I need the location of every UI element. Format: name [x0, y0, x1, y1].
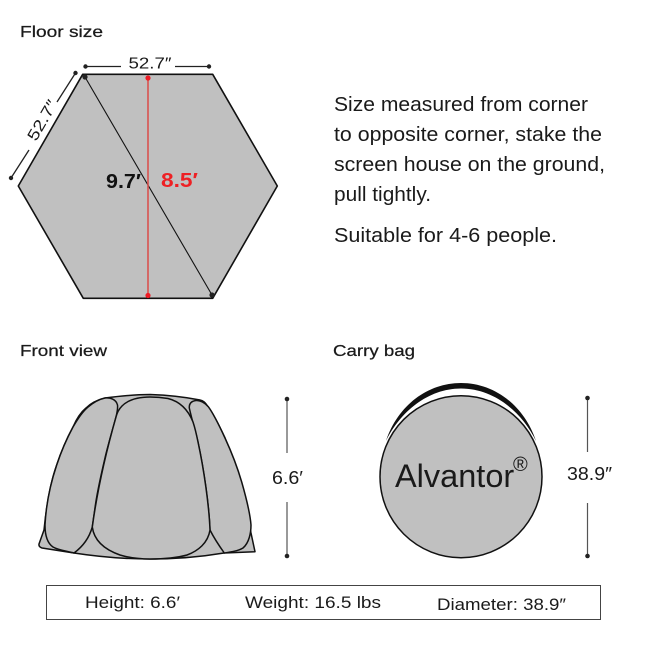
center panel	[92, 397, 210, 559]
right panel	[189, 400, 251, 553]
description text: pull tightly.	[334, 184, 431, 206]
heading: carry bag: Carry bag	[333, 343, 415, 360]
carry bag illustration	[380, 383, 542, 558]
description text	[334, 94, 605, 247]
height dimension: 6.6′	[272, 468, 304, 488]
top side dimension	[83, 56, 211, 72]
brand name: Alvantor	[395, 458, 514, 494]
bag body	[380, 396, 542, 558]
diagonal measure line	[82, 74, 215, 298]
front view tent illustration	[39, 394, 255, 559]
hexagon shape	[18, 74, 277, 298]
bag diameter dimension: 38.9″	[567, 464, 613, 484]
description text: Suitable for 4-6 people.	[334, 225, 557, 247]
left panel	[45, 398, 118, 553]
tent silhouette	[39, 394, 255, 559]
red height line	[145, 75, 151, 298]
spec: weight: Weight: 16.5 lbs	[245, 593, 381, 612]
description text: Size measured from corner	[334, 94, 588, 116]
registered mark: ®	[513, 454, 528, 476]
specification bar	[46, 586, 600, 620]
spec: height: Height: 6.6′	[85, 593, 180, 612]
description text: screen house on the ground,	[334, 154, 605, 176]
left side dimension: 52.7″	[25, 97, 62, 144]
description text: to opposite corner, stake the	[334, 124, 602, 146]
label: 9.7 feet: 9.7′	[106, 171, 141, 193]
heading: front view: Front view	[20, 343, 108, 360]
label: 8.5 feet: 8.5′	[161, 170, 198, 192]
left side dimension	[9, 71, 78, 180]
bag diameter dimension	[567, 396, 613, 558]
spec: diameter: Diameter: 38.9″	[437, 595, 566, 614]
top side dimension: 52.7″	[128, 56, 172, 72]
heading: floor size: Floor size	[20, 24, 103, 41]
bag handle	[386, 383, 536, 441]
height dimension	[272, 397, 304, 558]
hexagon floor diagram	[18, 74, 277, 298]
